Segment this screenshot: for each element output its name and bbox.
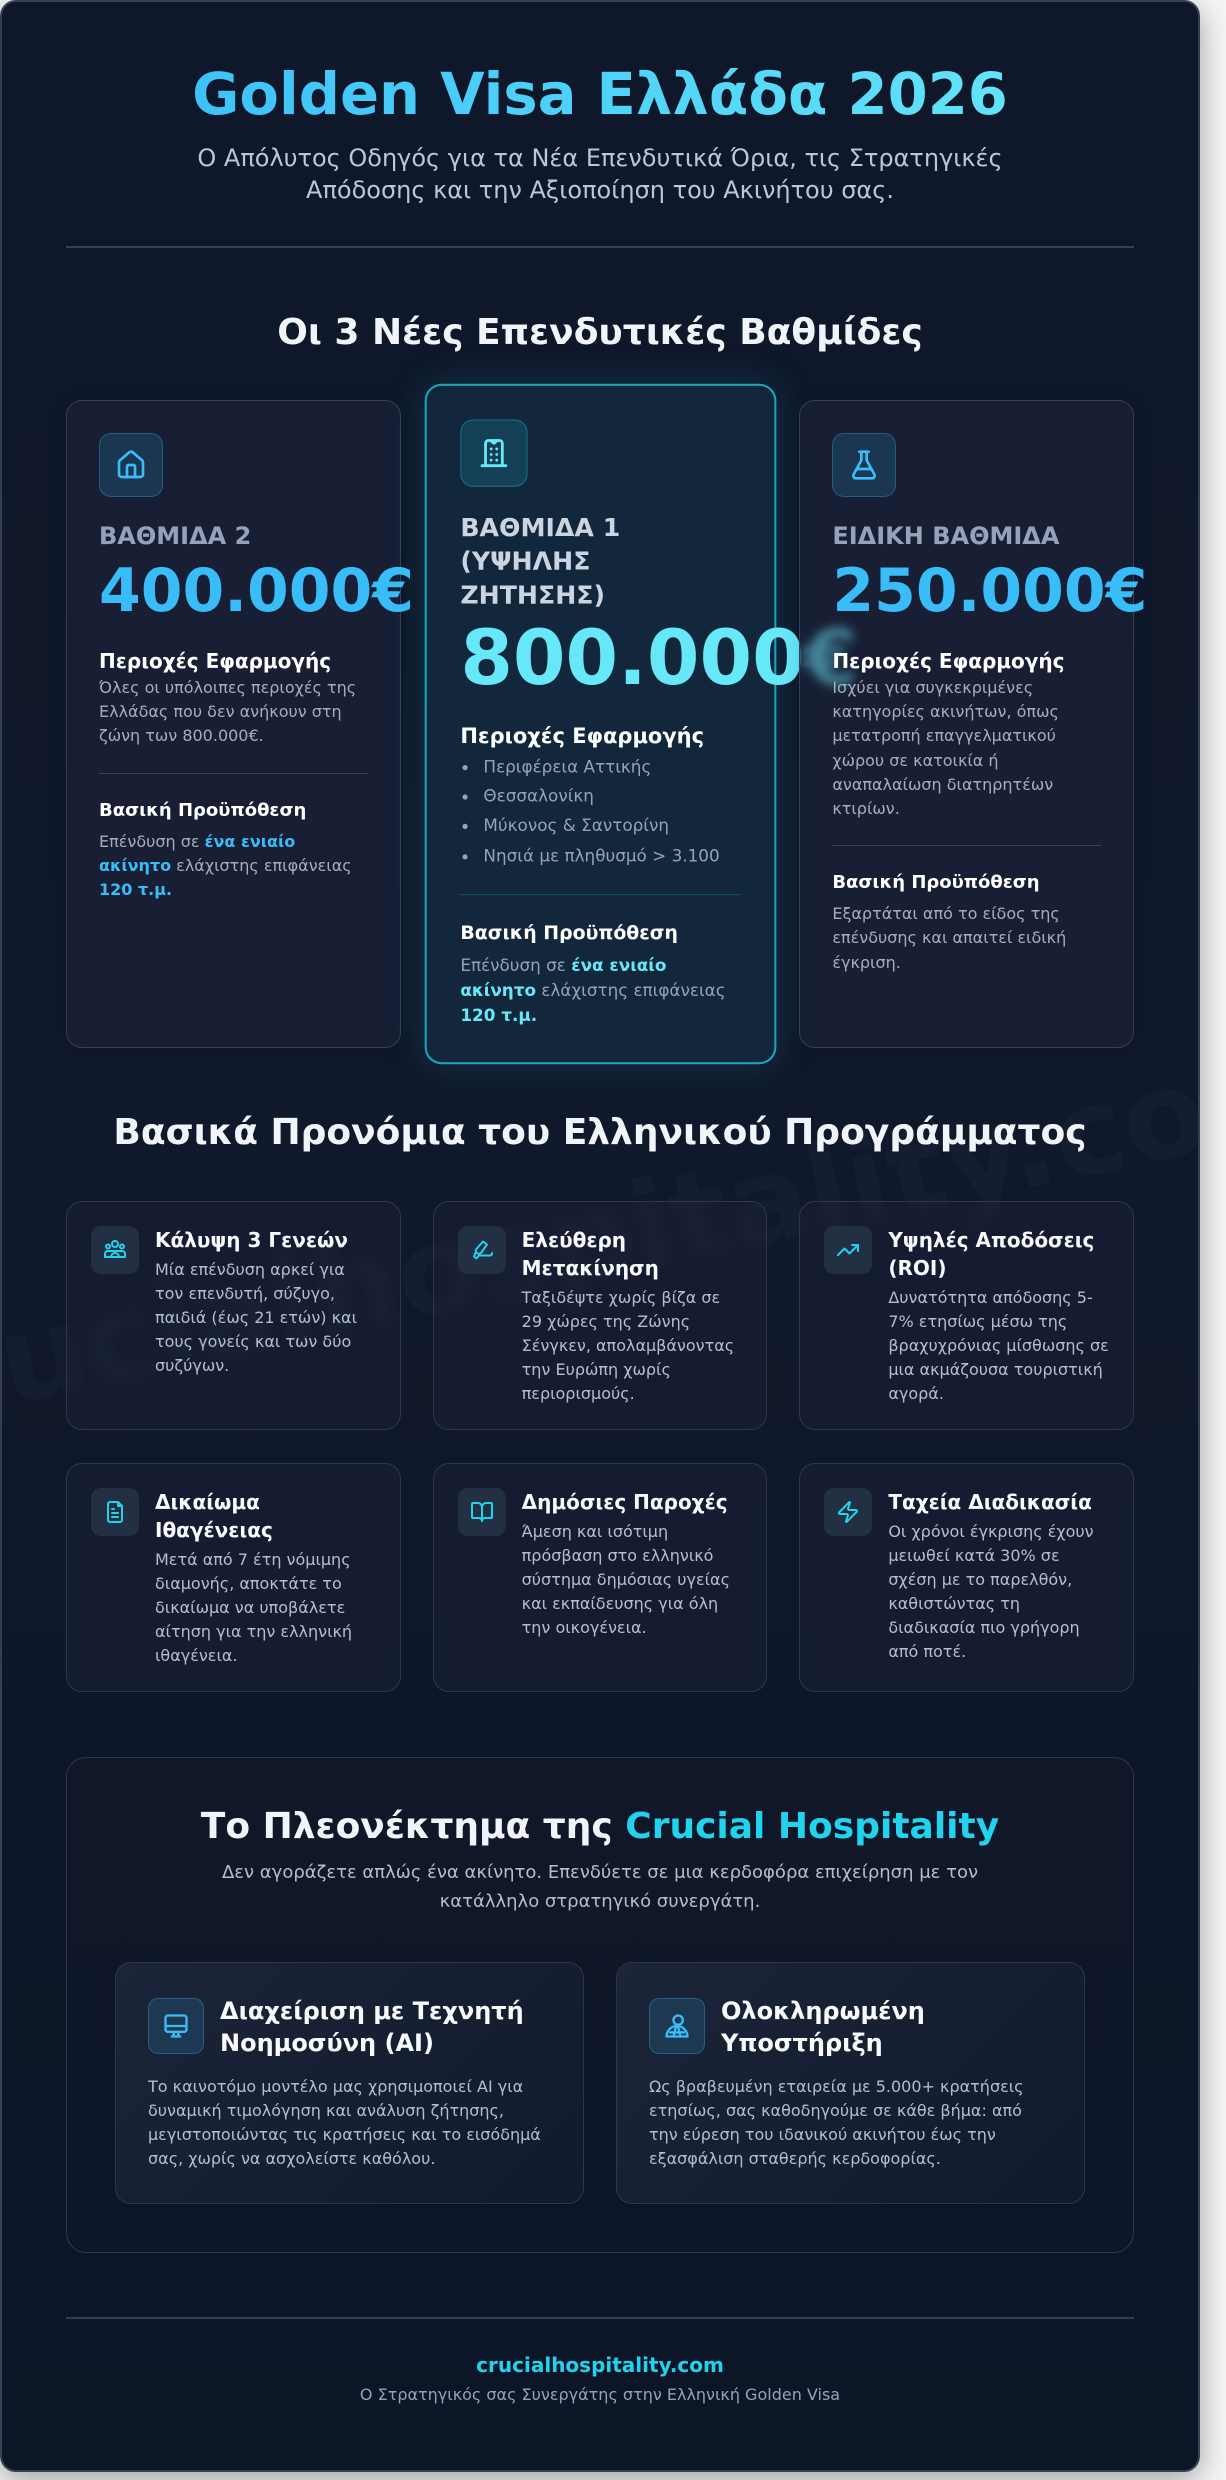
benefit text: αίτηση για την ελληνική [155, 1622, 352, 1641]
card header [649, 1997, 925, 2057]
footer website: crucialhospitality.com [476, 2353, 724, 2377]
application areas heading: Περιοχές Εφαρμογής [460, 723, 704, 748]
advantage intro text: κατάλληλο στρατηγικό συνεργάτη. [440, 1891, 760, 1912]
application areas text: κτιρίων. [832, 799, 900, 818]
icon: document [91, 1488, 139, 1536]
requirement text: ακίνητο ελάχιστης επιφάνειας [460, 980, 725, 1000]
tier name: ΖΗΤΗΣΗΣ) [460, 580, 605, 610]
application areas text: Ισχύει για συγκεκριμένες [832, 678, 1033, 697]
panel: Crucial Hospitality advantage [66, 1757, 1134, 2253]
card text: εξασφάλιση σταθερής κερδοφορίας. [649, 2149, 941, 2168]
price: 400.000€ [99, 556, 414, 626]
benefit text: Κάλυψη 3 Γενεών [155, 1228, 348, 1252]
requirement heading: Βασική Προϋπόθεση [460, 923, 678, 945]
card text: σας, χωρίς να ασχολείστε καθόλου. [148, 2149, 435, 2168]
application areas list: Περιφέρεια Αττικής [483, 757, 651, 776]
benefit text: συζύγων. [155, 1356, 229, 1375]
requirement text: έγκριση. [832, 953, 901, 972]
benefit text: Ταξιδέψτε χωρίς βίζα σε [522, 1288, 720, 1307]
card: full support [616, 1962, 1085, 2204]
requirement text [99, 832, 352, 899]
benefit text: την οικογένεια. [522, 1618, 647, 1637]
heading: investment tiers: Οι 3 Νέες Επενδυτικές Βαθμίδες [277, 312, 923, 353]
application areas list: Μύκονος & Σαντορίνη [483, 816, 669, 836]
card: AI management [115, 1962, 584, 2204]
icon: house [99, 433, 163, 497]
application areas text: χώρου σε κατοικία ή [832, 751, 999, 770]
benefit text: σύστημα δημόσιας υγείας [522, 1570, 730, 1589]
benefit text: πρόσβαση στο ελληνικό [522, 1546, 713, 1565]
icon: family [91, 1226, 139, 1274]
benefit text [522, 1228, 734, 1403]
benefit text: τους γονείς και των δύο [155, 1332, 351, 1351]
panel: benefit citizenship [66, 1463, 401, 1692]
benefit text: αγορά. [888, 1384, 944, 1403]
icon: signature [458, 1226, 506, 1274]
icon: open book [458, 1488, 506, 1536]
benefit text: Ιθαγένειας [155, 1518, 273, 1542]
requirement text: ακίνητο ελάχιστης επιφάνειας [99, 856, 352, 875]
requirement text: 120 τ.μ. [99, 880, 172, 899]
benefit text: ιθαγένεια. [155, 1646, 238, 1665]
application areas list [462, 757, 719, 865]
tier name: ΒΑΘΜΙΔΑ 2 [99, 522, 251, 550]
advantage intro text: Δεν αγοράζετε απλώς ένα ακίνητο. Επενδύετε σε μια κερδοφόρα επιχείρηση με τον [222, 1862, 978, 1883]
benefit text [155, 1490, 352, 1665]
application areas text: Όλες οι υπόλοιπες περιοχές της [99, 678, 356, 697]
icon: flask [832, 433, 896, 497]
application areas text [832, 678, 1059, 818]
tier name: ΒΑΘΜΙΔΑ 1 [460, 513, 620, 542]
application areas text: ζώνη των 800.000€. [99, 726, 264, 745]
benefit text: σχέση με το παρελθόν, [888, 1570, 1072, 1589]
benefit text: Άμεση και ισότιμη [522, 1522, 668, 1541]
requirement text: επένδυσης και απαιτεί ειδική [832, 928, 1066, 947]
tier name [460, 513, 620, 610]
benefit text: καθιστώντας τη [888, 1594, 1020, 1613]
requirement text: Επένδυση σε ένα ενιαίο [99, 832, 295, 851]
benefit text: (ROI) [888, 1256, 946, 1280]
title [66, 56, 1134, 134]
icon: lightning bolt [824, 1488, 872, 1536]
benefit text: διαδικασία πιο γρήγορη [888, 1618, 1080, 1637]
application areas heading: Περιοχές Εφαρμογής [832, 649, 1064, 673]
price: 800.000€ [460, 614, 857, 702]
benefit text [155, 1228, 357, 1375]
application areas text [99, 678, 356, 745]
panel: benefit free movement [433, 1201, 767, 1430]
icon: monitor [148, 1998, 204, 2054]
subtitle [197, 144, 1003, 204]
requirement heading: Βασική Προϋπόθεση [99, 800, 306, 821]
footer tagline: Ο Στρατηγικός σας Συνεργάτης στην Ελληνική Golden Visa [360, 2385, 840, 2404]
requirement heading: Βασική Προϋπόθεση [832, 872, 1040, 893]
card text: ετησίως, σας καθοδηγούμε σε κάθε βήμα: από [649, 2101, 1022, 2120]
requirement text [460, 955, 725, 1026]
requirement text: 120 τ.μ. [460, 1006, 537, 1026]
tier name: (ΥΨΗΛΗΣ [460, 547, 590, 576]
icon: person support [649, 1998, 705, 2054]
icon: trending up [824, 1226, 872, 1274]
benefit text: Δυνατότητα απόδοσης 5- [888, 1288, 1093, 1307]
benefit text: παιδιά (έως 21 ετών) και [155, 1308, 357, 1327]
application areas text: Ελλάδας που δεν ανήκουν στη [99, 702, 342, 721]
tier name: ΕΙΔΙΚΗ ΒΑΘΜΙΔΑ [832, 522, 1059, 550]
card header: Υποστήριξη [721, 2029, 883, 2057]
application areas heading: Περιοχές Εφαρμογής [99, 649, 331, 673]
requirement text [832, 904, 1066, 972]
panel: benefit public services [433, 1463, 767, 1692]
panel: benefit fast process [799, 1463, 1134, 1692]
card text [148, 2077, 541, 2168]
panel: benefit three generations [66, 1201, 401, 1430]
benefit text: και εκπαίδευσης για όλη [522, 1594, 718, 1613]
advantage heading: Το Πλεονέκτημα της Crucial Hospitality [201, 1806, 999, 1847]
benefit text [888, 1228, 1109, 1403]
icon: hotel building [460, 420, 527, 487]
benefit text: τον επενδυτή, σύζυγο, [155, 1284, 335, 1303]
benefit text: 29 χώρες της Ζώνης [522, 1312, 690, 1331]
benefit text: δικαίωμα να υποβάλετε [155, 1598, 345, 1617]
benefit text: την Ευρώπη χωρίς [522, 1360, 671, 1379]
benefit text [888, 1490, 1094, 1661]
card text [649, 2077, 1024, 2168]
title: Golden Visa Ελλάδα 2026 [192, 61, 1008, 128]
application areas list: Νησιά με πληθυσμό > 3.100 [483, 845, 719, 865]
card text: δυναμική τιμολόγηση και ανάλυση ζήτησης, [148, 2101, 504, 2120]
application areas text: κατηγορίες ακινήτων, όπως [832, 702, 1059, 721]
requirement text: Επένδυση σε ένα ενιαίο [460, 955, 666, 975]
benefit text: περιορισμούς. [522, 1384, 635, 1403]
benefit text: βραχυχρόνιας μίσθωσης σε [888, 1336, 1109, 1355]
benefit text: 7% ετησίως μέσω της [888, 1312, 1067, 1331]
benefit text: μειωθεί κατά 30% σε [888, 1546, 1060, 1565]
card header: Διαχείριση με Τεχνητή [220, 1997, 524, 2025]
card text: Το καινοτόμο μοντέλο μας χρησιμοποιεί AI για [148, 2077, 523, 2096]
benefit text [522, 1490, 730, 1637]
benefit text: από ποτέ. [888, 1642, 966, 1661]
card text: Ως βραβευμένη εταιρεία με 5.000+ κρατήσεις [649, 2077, 1024, 2096]
card text: μεγιστοποιώντας τις κρατήσεις και το εισόδημά [148, 2125, 541, 2144]
benefit text: διαμονής, αποκτάτε το [155, 1574, 342, 1593]
benefit text: Μετά από 7 έτη νόμιμης [155, 1550, 351, 1569]
panel: special tier [799, 400, 1134, 1048]
benefit text: Μία επένδυση αρκεί για [155, 1260, 345, 1279]
panel: tier 1 featured [424, 384, 776, 1064]
heading: benefits: Βασικά Προνόμια του Ελληνικού Προγράμματος [113, 1112, 1087, 1153]
subtitle: Ο Απόλυτος Οδηγός για τα Νέα Επενδυτικά Όρια, τις Στρατηγικές [197, 144, 1003, 172]
application areas text: μετατροπή επαγγελματικού [832, 726, 1056, 745]
card text: την εύρεση του ιδανικού ακινήτου έως την [649, 2125, 996, 2144]
panel: benefit high returns [799, 1201, 1134, 1430]
card header: Νοημοσύνη (AI) [220, 2029, 434, 2057]
subtitle: Απόδοσης και την Αξιοποίηση του Ακινήτου σας. [306, 176, 894, 204]
card header: Ολοκληρωμένη [721, 1997, 925, 2025]
application areas text: αναπαλαίωση διατηρητέων [832, 775, 1053, 794]
advantage intro text [222, 1862, 978, 1912]
benefit text: Υψηλές Αποδόσεις [888, 1228, 1094, 1252]
card header [148, 1997, 524, 2057]
benefit text: μια ακμάζουσα τουριστική [888, 1360, 1103, 1379]
application areas list: Θεσσαλονίκη [483, 786, 594, 806]
benefit text: Οι χρόνοι έγκρισης έχουν [888, 1522, 1094, 1541]
benefit text: Ταχεία Διαδικασία [888, 1490, 1092, 1514]
benefit text: Σένγκεν, απολαμβάνοντας [522, 1336, 734, 1355]
benefit text: Ελεύθερη [522, 1228, 626, 1252]
panel: tier 2 [66, 400, 401, 1048]
benefit text: Μετακίνηση [522, 1256, 659, 1280]
requirement text: Εξαρτάται από το είδος της [832, 904, 1060, 923]
price: 250.000€ [832, 556, 1147, 626]
benefit text: Δημόσιες Παροχές [522, 1490, 728, 1514]
benefit text: Δικαίωμα [155, 1490, 260, 1514]
